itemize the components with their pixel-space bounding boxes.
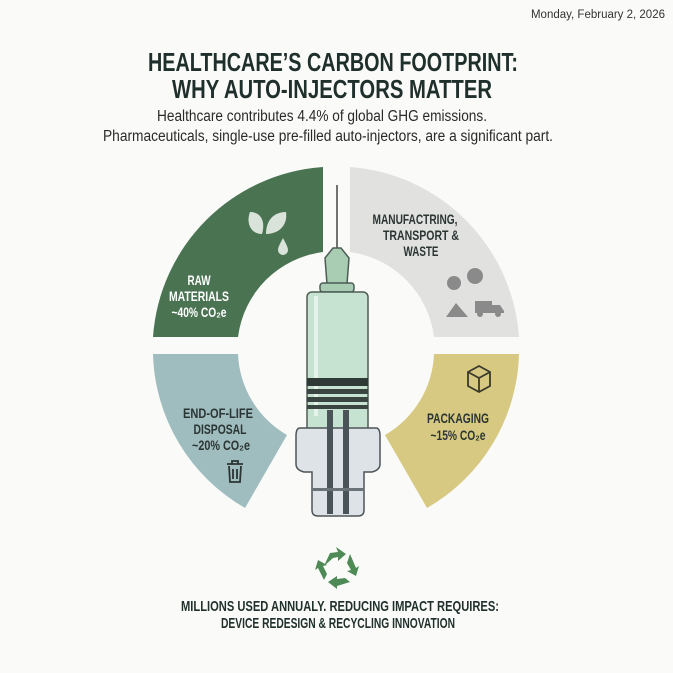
label: end of life — [183, 405, 253, 453]
panel: raw materials — [153, 167, 323, 337]
panel: manufacturing — [350, 167, 519, 337]
label: manufacturing: WASTE — [404, 243, 438, 259]
label: end of life: DISPOSAL — [194, 421, 247, 437]
date: Monday, February 2, 2026 — [531, 9, 665, 21]
title: WHY AUTO-INJECTORS MATTER — [172, 74, 492, 104]
bottom message: DEVICE REDESIGN & RECYCLING INNOVATION — [221, 615, 455, 632]
label: raw materials: ~40% CO₂e — [172, 304, 227, 320]
title — [148, 47, 518, 104]
bottom message — [181, 598, 499, 632]
panel: end of life — [153, 354, 287, 508]
icon: recycle arrows — [315, 547, 359, 589]
label: raw materials: RAW — [188, 272, 211, 288]
label: end of life: END-OF-LIFE — [183, 405, 253, 421]
icon: leaves — [248, 212, 288, 255]
label: end of life: ~20% CO₂e — [192, 437, 250, 453]
label: packaging: PACKAGING — [427, 410, 489, 426]
label: raw materials: MATERIALS — [169, 288, 229, 304]
label: raw materials — [169, 272, 229, 320]
label: manufacturing — [372, 211, 459, 259]
label: manufacturing: MANUFACTRING, — [372, 211, 458, 227]
label: packaging: ~15% CO₂e — [430, 427, 486, 443]
syringe — [296, 185, 380, 516]
subtitle — [103, 108, 553, 145]
label: manufacturing: TRANSPORT & — [383, 227, 459, 243]
icon: gears and truck — [446, 268, 504, 317]
title: HEALTHCARE’S CARBON FOOTPRINT: — [148, 47, 518, 77]
subtitle: Healthcare contributes 4.4% of global GHG emissions. — [157, 108, 487, 125]
icon: box — [468, 366, 490, 392]
panel: packaging — [385, 354, 519, 508]
subtitle: Pharmaceuticals, single-use pre-filled auto-injectors, are a significant part. — [103, 128, 553, 145]
icon: trash — [227, 461, 243, 482]
label: packaging — [427, 410, 489, 443]
bottom message: MILLIONS USED ANNUALY. REDUCING IMPACT REQUIRES: — [181, 598, 499, 615]
